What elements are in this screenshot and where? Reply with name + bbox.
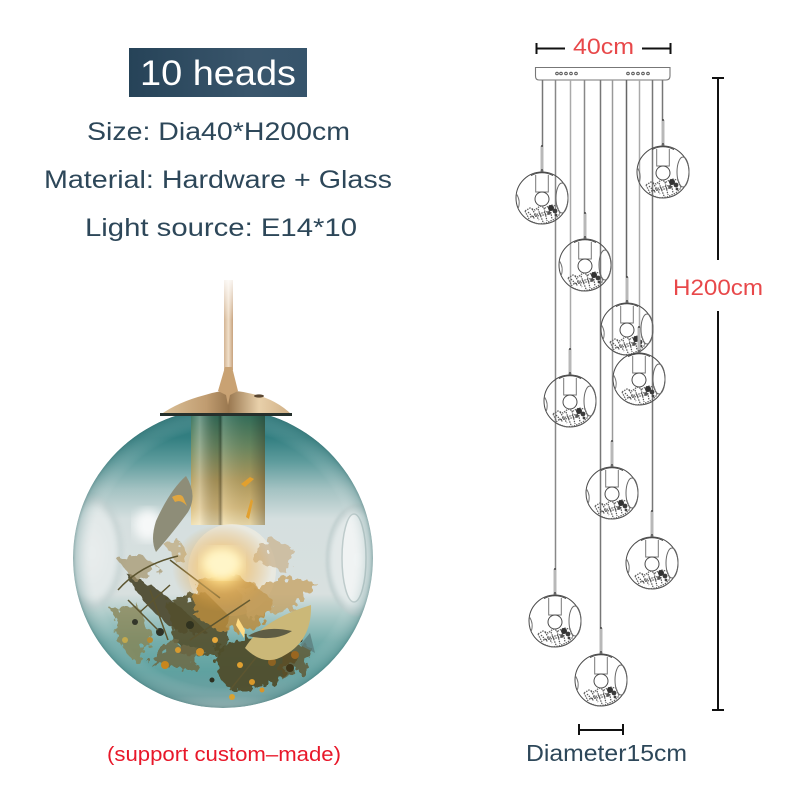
- diagram: pendant globes: [516, 119, 689, 706]
- canopy: [160, 367, 292, 416]
- dimension: width 40cm: 40cm: [573, 34, 634, 59]
- diagram: ceiling plate: [536, 68, 670, 80]
- dimension: height H200cm: [673, 78, 763, 710]
- heading badge: 10 heads: [129, 48, 307, 97]
- heading badge: 10 heads: 10 heads: [140, 54, 296, 93]
- flora: dark foliage: [112, 538, 317, 692]
- caption: support custom-made: (support custom–made): [107, 744, 341, 766]
- bulb: [188, 524, 276, 594]
- dimension: width 40cm: [536, 34, 670, 59]
- product photo: glass pendant lamp: [62, 280, 390, 708]
- glass globe: [73, 416, 373, 708]
- dimension: height H200cm: H200cm: [673, 275, 763, 300]
- dimension: globe diameter: Diameter15cm: [526, 740, 687, 766]
- dimension: globe diameter: [526, 724, 687, 766]
- lamp rod: [222, 280, 235, 370]
- text: light source: Light source: E14*10: [85, 214, 357, 242]
- diagram: suspension wires: [542, 80, 662, 630]
- leaf: silver upper: [153, 476, 193, 552]
- leaf: gold mesh lower: [245, 605, 315, 660]
- text: size: Size: Dia40*H200cm: [87, 118, 350, 146]
- text: material: Material: Hardware + Glass: [44, 166, 392, 194]
- glow: [174, 526, 270, 606]
- socket: [191, 412, 265, 525]
